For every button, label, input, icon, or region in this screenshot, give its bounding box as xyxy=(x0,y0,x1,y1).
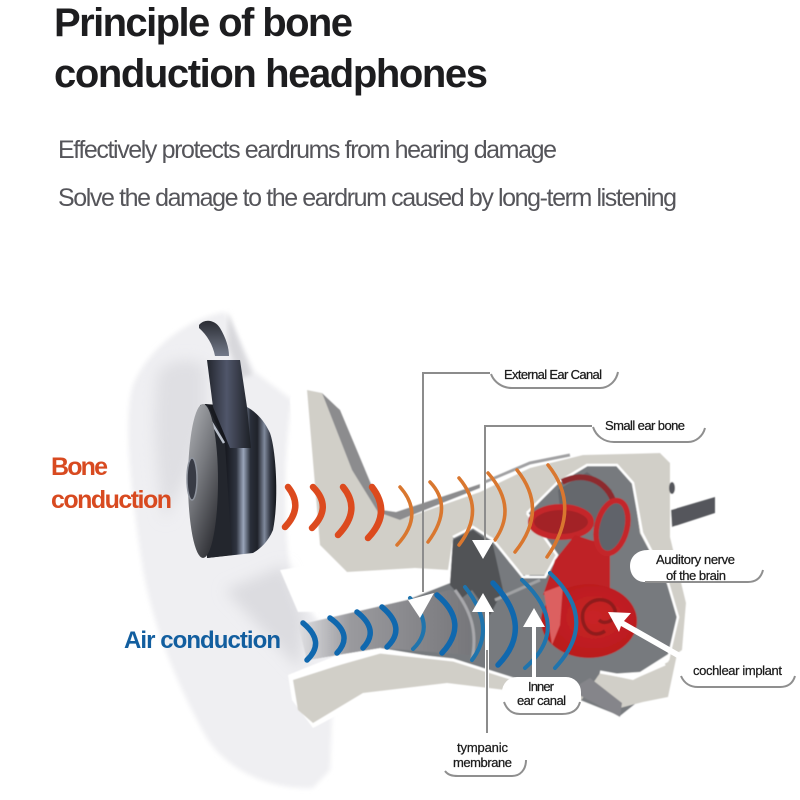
eardrum bones xyxy=(450,530,503,615)
nerve knob xyxy=(669,482,675,494)
bone white rim xyxy=(295,652,665,697)
upper bone xyxy=(307,390,686,660)
bone top line xyxy=(485,455,570,482)
callout: external ear canal: External Ear Canal xyxy=(504,367,602,382)
vestibule xyxy=(543,535,610,595)
callout: small ear bone: Small ear bone xyxy=(605,418,685,433)
top hollow xyxy=(558,472,612,530)
orange bone conduction waves xyxy=(285,465,565,557)
face hole xyxy=(187,458,197,500)
ear illustration xyxy=(128,312,335,788)
subtitle text xyxy=(58,136,677,212)
arrow xyxy=(472,540,494,559)
callout: inner ear canal: ear canal xyxy=(517,693,566,708)
blue air conduction waves xyxy=(303,573,576,668)
concha shadow xyxy=(225,565,305,670)
white skin edge xyxy=(280,377,690,728)
rim highlight xyxy=(201,405,224,443)
cross-section of ear xyxy=(280,377,715,728)
title: Principle of bone xyxy=(54,1,353,45)
bone conduction label: conduction xyxy=(51,486,172,514)
cavity rim xyxy=(453,465,678,660)
callout: tympanic membrane xyxy=(445,593,526,776)
nerve xyxy=(671,497,715,527)
ossicle rod xyxy=(495,580,540,600)
title: conduction headphones xyxy=(54,52,488,96)
title xyxy=(54,1,488,96)
cochlea highlight xyxy=(544,585,563,645)
headphone xyxy=(187,321,276,558)
driver face xyxy=(188,404,218,558)
cochlea spiral xyxy=(583,600,615,634)
cavity gray base xyxy=(300,465,677,716)
callout: inner ear canal xyxy=(502,608,581,714)
callout: external ear canal xyxy=(408,367,618,618)
callout: auditory nerve: Auditory nerve xyxy=(656,552,735,567)
arrow xyxy=(408,593,434,618)
vertical canal xyxy=(591,497,633,557)
callout: cochlear implant xyxy=(608,612,795,687)
arrow xyxy=(485,610,489,735)
air conduction label: Air conduction xyxy=(124,627,281,654)
bone conduction label xyxy=(51,453,172,514)
subtitle text: Effectively protects eardrums from hearing damage xyxy=(58,136,557,164)
inner ear hollow xyxy=(155,360,205,520)
arrow xyxy=(608,612,682,659)
stem xyxy=(207,360,251,448)
bone dark strip xyxy=(322,393,480,520)
callout: auditory nerve: of the brain xyxy=(666,568,726,583)
callout: small ear bone xyxy=(472,418,705,559)
outer ear xyxy=(128,312,335,788)
cable xyxy=(199,321,229,356)
lower canal strip xyxy=(570,678,622,717)
callout: inner ear canal: Inner xyxy=(528,679,555,694)
air canal xyxy=(298,590,470,660)
callout: tympanic membrane: tympanic xyxy=(457,740,508,755)
cochlea xyxy=(541,584,637,658)
callout: tympanic membrane: membrane xyxy=(453,755,512,770)
driver rim xyxy=(200,404,232,558)
callout: cochlear implant: cochlear implant xyxy=(693,663,782,678)
callout: auditory nerve xyxy=(630,550,764,583)
horizontal canal xyxy=(531,507,591,537)
arrow xyxy=(532,627,536,680)
inner ear organ xyxy=(531,472,637,658)
driver body xyxy=(205,404,276,558)
top canal xyxy=(562,477,614,503)
lower bone xyxy=(293,640,680,723)
ear shadow xyxy=(228,312,252,378)
eardrum membrane line xyxy=(455,590,474,660)
bone conduction label: Bone xyxy=(51,453,108,481)
subtitle text: Solve the damage to the eardrum caused by long-term listening xyxy=(58,184,677,212)
